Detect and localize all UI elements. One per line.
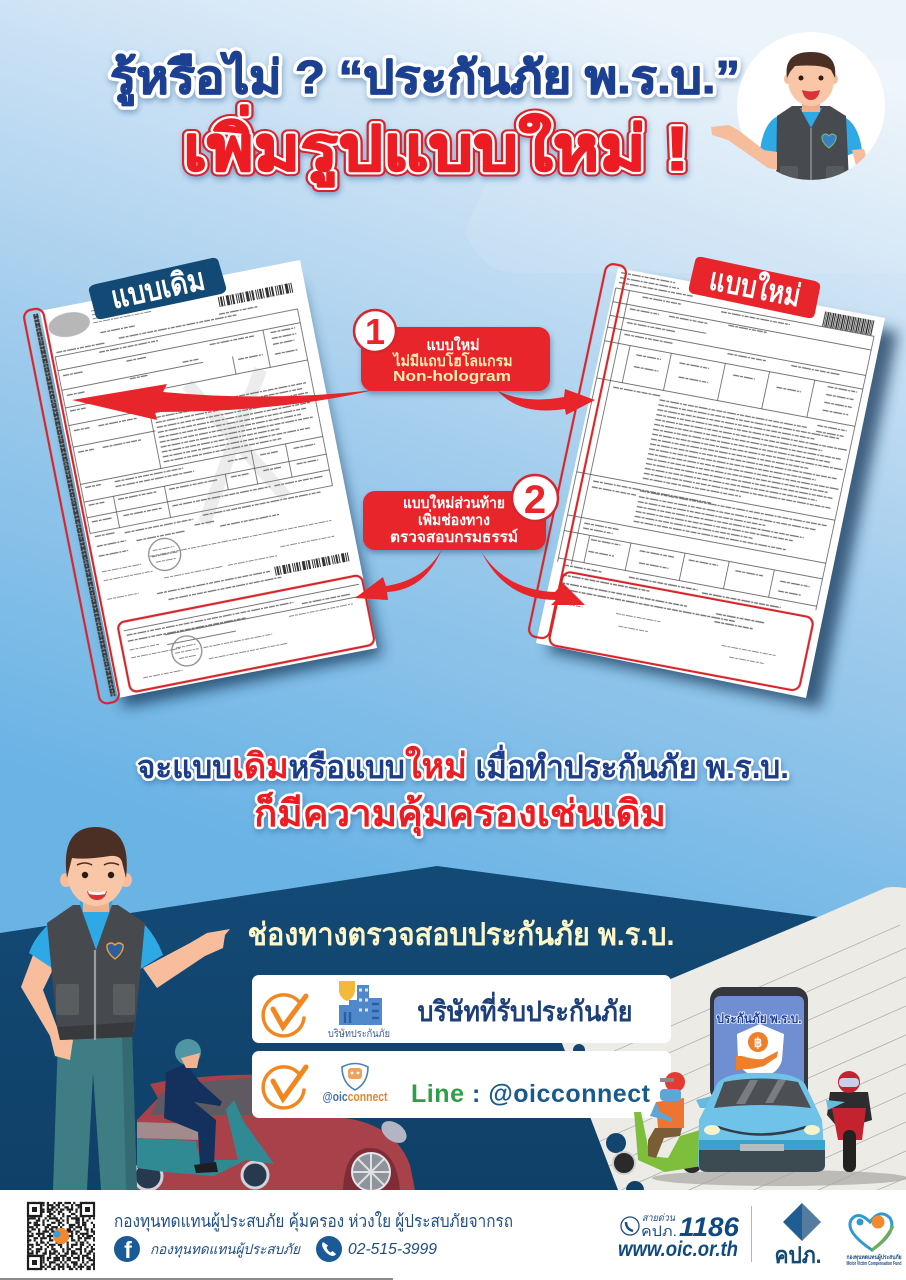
- new form document: [527, 257, 898, 708]
- callout 2 text: แบบใหม่ส่วนท้าย: [403, 494, 505, 512]
- scooter front wheel: [242, 1162, 268, 1188]
- hologram strip: [35, 314, 113, 697]
- presenter logo: [822, 134, 836, 148]
- rider helmet: [175, 1039, 201, 1065]
- vest pockets: [56, 984, 135, 1015]
- presenter in circle: [711, 32, 885, 182]
- title line 2: เพิ่มรูปแบบใหม่ !: [183, 105, 689, 187]
- footer tagline: กองทุนทดแทนผู้ประสบภัย คุ้มครอง ห่วงใย ผู้ประสบภัยจากรถ: [114, 1211, 513, 1232]
- section heading: ช่องทางตรวจสอบประกันภัย พ.ร.บ.: [248, 917, 674, 952]
- title line 2: เพิ่มรูปแบบใหม่ !: [183, 105, 689, 187]
- presenter arm pointing: [711, 125, 777, 170]
- sleeves: [29, 923, 163, 970]
- footer highlight box: [117, 575, 375, 693]
- pointing arm: [143, 929, 230, 988]
- line text: Line : @oicconnect: [411, 1080, 651, 1108]
- red car wheel: [352, 1153, 390, 1191]
- callout 1 text: ไม่มีแถบโฮโลแกรม: [392, 351, 512, 370]
- hotline: คปภ.: [641, 1223, 677, 1239]
- old form document: [23, 257, 382, 708]
- callout 2 text: ตรวจสอบกรมธรรม์: [390, 528, 518, 546]
- hotline: [618, 1212, 740, 1261]
- hand: [736, 1051, 778, 1071]
- fund logo: [846, 1214, 902, 1267]
- blue car: [696, 1073, 845, 1172]
- vest logo: [107, 943, 123, 959]
- building icon: [339, 981, 382, 1025]
- coin: ฿: [754, 1035, 762, 1050]
- callout 1 text: [392, 336, 512, 385]
- footer: [0, 1190, 906, 1280]
- vest: [47, 905, 145, 1040]
- title line 1: รู้หรือไม่ ? “ประกันภัย พ.ร.บ.”: [110, 51, 740, 106]
- hotline: สายด่วน: [642, 1213, 676, 1224]
- oicconnect logo: @oicconnect: [322, 1089, 388, 1104]
- check icon: [263, 1067, 306, 1108]
- new form label: แบบใหม่: [707, 261, 804, 313]
- arrow to new footer: [481, 551, 585, 605]
- cream panel with lines: [562, 887, 906, 1190]
- callout 2 text: เพิ่มช่องทาง: [418, 509, 490, 529]
- green scooter rider: [648, 1072, 685, 1158]
- arrows from callout 1: [72, 384, 595, 420]
- company text: บริษัทที่รับประกันภัย: [418, 991, 632, 1027]
- facebook icon: [114, 1236, 140, 1263]
- title line 1: รู้หรือไม่ ? “ประกันภัย พ.ร.บ.”: [110, 51, 740, 106]
- old form label: แบบเดิม: [108, 262, 208, 316]
- neck and collar: [80, 900, 112, 950]
- message line 2: ก็มีความคุ้มครองเช่นเดิม: [254, 790, 666, 837]
- phone number: 02-515-3999: [348, 1241, 437, 1258]
- left arm: [21, 955, 73, 1060]
- callout 2: [363, 475, 558, 550]
- check icon: [263, 995, 306, 1036]
- number badge 1: [354, 310, 396, 352]
- phone text: ประกันภัย พ.ร.บ.: [716, 1011, 802, 1026]
- callout 2 text: [390, 494, 518, 546]
- oicconnect logo: [322, 1064, 388, 1104]
- arrows from callout 2: [355, 549, 585, 605]
- phone with car illustration: [613, 987, 906, 1186]
- rider body: [164, 1064, 222, 1165]
- message headline: [137, 744, 789, 837]
- new form paper: [536, 268, 885, 698]
- OIC logo: [774, 1203, 822, 1268]
- scooter body: [137, 1100, 274, 1176]
- hotline: www.oic.or.th: [618, 1238, 738, 1261]
- large presenter: [21, 827, 230, 1190]
- callout 1: [354, 310, 550, 391]
- decorative pale panel and skyline: [465, 60, 906, 273]
- QR code: [27, 1203, 95, 1269]
- green scooter: [613, 1072, 702, 1174]
- old form content: [23, 257, 376, 705]
- head: [60, 827, 132, 906]
- title line 2: เพิ่มรูปแบบใหม่ !: [183, 105, 689, 187]
- number badge 2: [512, 475, 558, 522]
- OIC logo: คปภ.: [774, 1242, 822, 1268]
- red motorcycle: [827, 1071, 872, 1172]
- title: [110, 51, 740, 187]
- scooter rider: [134, 1039, 274, 1190]
- callout 1 text: แบบใหม่: [426, 336, 480, 354]
- hologram-free highlight box: [528, 263, 627, 639]
- number badge 1: 1: [365, 311, 385, 352]
- new form shadow: [548, 282, 898, 708]
- navy panel: [0, 866, 906, 1190]
- arrow to old strip: [72, 384, 374, 420]
- hologram highlight box: [23, 307, 120, 705]
- facebook name: กองทุนทดแทนผู้ประสบภัย: [150, 1241, 301, 1258]
- card: line: [252, 1051, 671, 1118]
- shield: [737, 1024, 784, 1077]
- red car: [137, 1075, 415, 1191]
- building caption: บริษัทประกันภัย: [328, 1028, 390, 1040]
- arrow to old footer: [355, 549, 442, 600]
- card: insurance company: [252, 975, 671, 1043]
- old form shadow: [46, 285, 382, 708]
- facebook icon: f: [124, 1237, 132, 1263]
- hotline: 1186: [679, 1212, 740, 1242]
- message line 1: จะแบบเดิมหรือแบบใหม่ เมื่อทำประกันภัย พ.ร.บ.: [137, 744, 789, 786]
- phone: [710, 987, 808, 1102]
- number badge 2: 2: [524, 478, 546, 522]
- scooter rear wheel: [134, 1162, 162, 1190]
- arrow to new strip: [498, 389, 595, 415]
- callout 1 text: Non-hologram: [393, 368, 511, 385]
- new form content: [527, 263, 879, 691]
- pants: [53, 1034, 137, 1190]
- old form paper: [40, 260, 377, 698]
- phone icon: [316, 1236, 342, 1262]
- new footer highlight box: [548, 571, 814, 691]
